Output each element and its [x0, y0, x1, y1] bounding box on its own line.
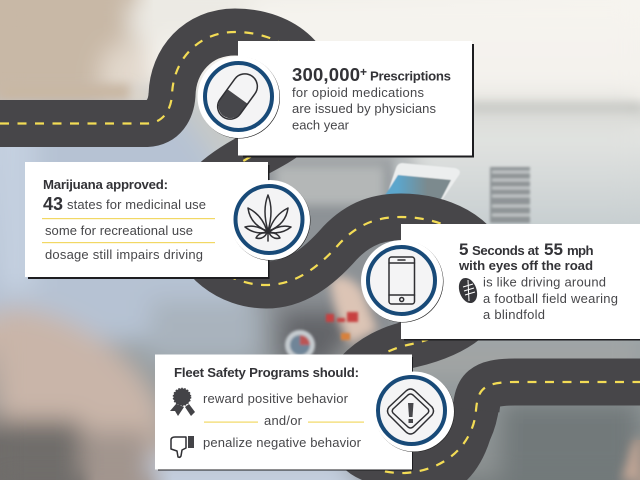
- stat: 43 states: [43, 194, 206, 214]
- panel: phone distraction: [401, 224, 640, 340]
- text: football field comparison: a blindfold: [483, 307, 545, 322]
- text: opioid description: [292, 85, 436, 132]
- stat: 300,000+ prescriptions: +: [360, 65, 367, 79]
- divider: and/or: and/or: [264, 413, 303, 428]
- list: marijuana notes: [42, 218, 215, 262]
- text: opioid description: for opioid medications: [292, 85, 424, 100]
- stat: 5 seconds at 55 mph: with eyes off the road: [458, 258, 593, 273]
- icon: warning sign badge: [374, 372, 454, 452]
- stat: 5 seconds at 55 mph: [458, 240, 594, 273]
- icon: smartphone badge: [361, 240, 444, 322]
- list: marijuana notes: dosage still impairs driving: [45, 247, 203, 262]
- heading: fleet safety programs: Fleet Safety Programs should:: [174, 365, 359, 380]
- text: penalize: penalize negative behavior: [203, 435, 362, 450]
- icon: cannabis leaf badge: [230, 180, 310, 260]
- text: football field comparison: [483, 274, 618, 322]
- stat: 300,000+ prescriptions: [292, 64, 451, 85]
- text: opioid description: are issued by physicians: [292, 101, 436, 116]
- stat: 5 seconds at 55 mph: 5: [459, 240, 468, 259]
- icon: award ribbon: [170, 388, 195, 416]
- stat: 43 states: 43: [43, 194, 63, 214]
- text: football field comparison: a football field wearing: [483, 291, 618, 306]
- text: opioid description: each year: [292, 118, 350, 132]
- list: marijuana notes: some for recreational use: [45, 223, 193, 238]
- icon: thumbs down: [171, 436, 194, 457]
- panel: fleet safety programs: [155, 354, 413, 470]
- text: reward: reward positive behavior: [203, 391, 349, 406]
- icon: football: [456, 275, 480, 306]
- phone in hand: [384, 163, 460, 206]
- stat: 5 seconds at 55 mph: mph: [567, 243, 594, 258]
- stat: 300,000+ prescriptions: 300,000: [292, 64, 360, 85]
- heading: marijuana approved: Marijuana approved:: [43, 177, 168, 192]
- stat: 5 seconds at 55 mph: Seconds at: [472, 243, 540, 258]
- text: football field comparison: is like driving around: [483, 274, 606, 290]
- panel: opioid prescriptions: [238, 41, 474, 158]
- panel: marijuana: [25, 162, 270, 279]
- stat: 5 seconds at 55 mph: 55: [544, 240, 563, 259]
- stat: 300,000+ prescriptions: Prescriptions: [370, 68, 451, 84]
- stat: 43 states: states for medicinal use: [67, 197, 206, 212]
- icon: pill badge: [198, 56, 280, 138]
